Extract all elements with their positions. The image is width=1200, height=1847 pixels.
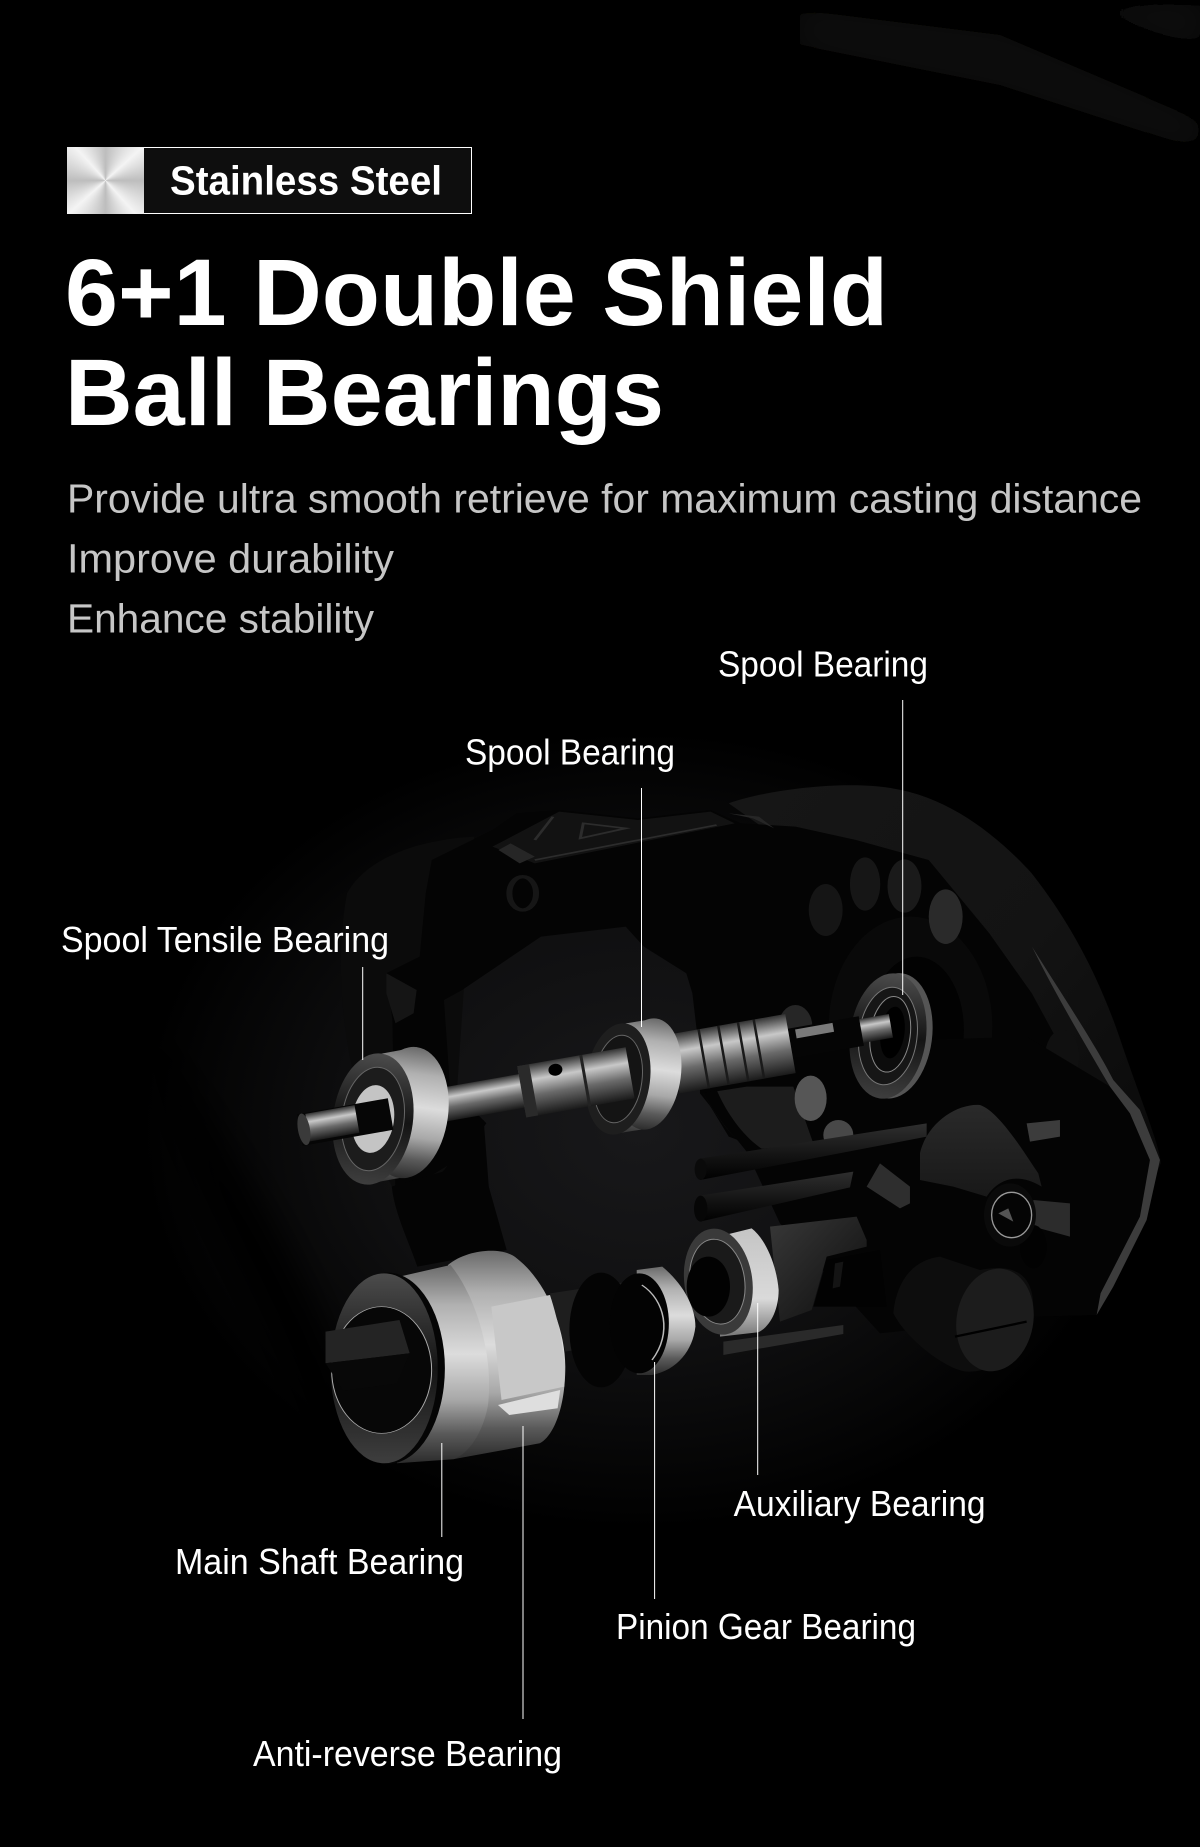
benefits text: Provide ultra smooth retrieve for maximum casting distance: [67, 476, 1142, 522]
benefits text: Enhance stability: [67, 596, 374, 642]
spool bearing, middle: [579, 1010, 688, 1143]
auxiliary bearing: [677, 1224, 779, 1339]
title: [65, 240, 888, 446]
callout: middle spool bearing: Spool Bearing: [465, 732, 675, 772]
callout: auxiliary bearing: Auxiliary Bearing: [734, 1483, 986, 1524]
callout: main shaft bearing: Main Shaft Bearing: [175, 1541, 464, 1582]
badge: Stainless Steel: [67, 147, 472, 214]
spool shaft tip: [295, 1098, 393, 1146]
title: 6+1 Double Shield: [65, 240, 888, 346]
badge: Stainless Steel: Stainless Steel: [170, 158, 442, 204]
callout: pinion gear bearing: Pinion Gear Bearing: [616, 1606, 916, 1647]
spool shaft collar and stem: [409, 1047, 635, 1137]
lower body, cover edge and plate: [700, 947, 1160, 1333]
lower left frame pillar: [392, 1120, 507, 1267]
plate dimples: [778, 857, 1079, 1083]
callout: anti-reverse bearing: Anti-reverse Bearing: [253, 1733, 562, 1774]
callout: spool tensile bearing: Spool Tensile Bearing: [61, 919, 389, 960]
side rods: [694, 1123, 927, 1222]
title: Ball Bearings: [65, 340, 664, 446]
main shaft and pinion assembly: [326, 1251, 695, 1464]
connecting shaft: [550, 1283, 634, 1352]
spool bearing at right end of shaft: [842, 968, 940, 1104]
spool shaft far end: [669, 996, 896, 1094]
bottom rod: [723, 1325, 843, 1355]
callout: top spool bearing: Spool Bearing: [718, 644, 928, 684]
benefits text: Improve durability: [67, 536, 395, 582]
gear ring: [984, 1183, 1036, 1247]
gear assembly: [677, 1105, 1070, 1378]
auxiliary barrel: [770, 1217, 887, 1322]
right barrel: [1020, 1200, 1070, 1268]
illustration: exploded reel with bearings: [295, 785, 1161, 1464]
main shaft bearing and anti-reverse sleeve: [326, 1251, 565, 1464]
swatch: brushed steel: [67, 147, 144, 214]
spool tensile bearing: [325, 1037, 456, 1194]
threaded screw: [1027, 1120, 1060, 1142]
pinion flange and bearing: [569, 1267, 695, 1387]
upper gear cap: [920, 1105, 1042, 1197]
reel body: side cover and frame: [341, 785, 1161, 1313]
benefits text: [67, 476, 1142, 642]
lower round cap: [893, 1257, 1042, 1378]
